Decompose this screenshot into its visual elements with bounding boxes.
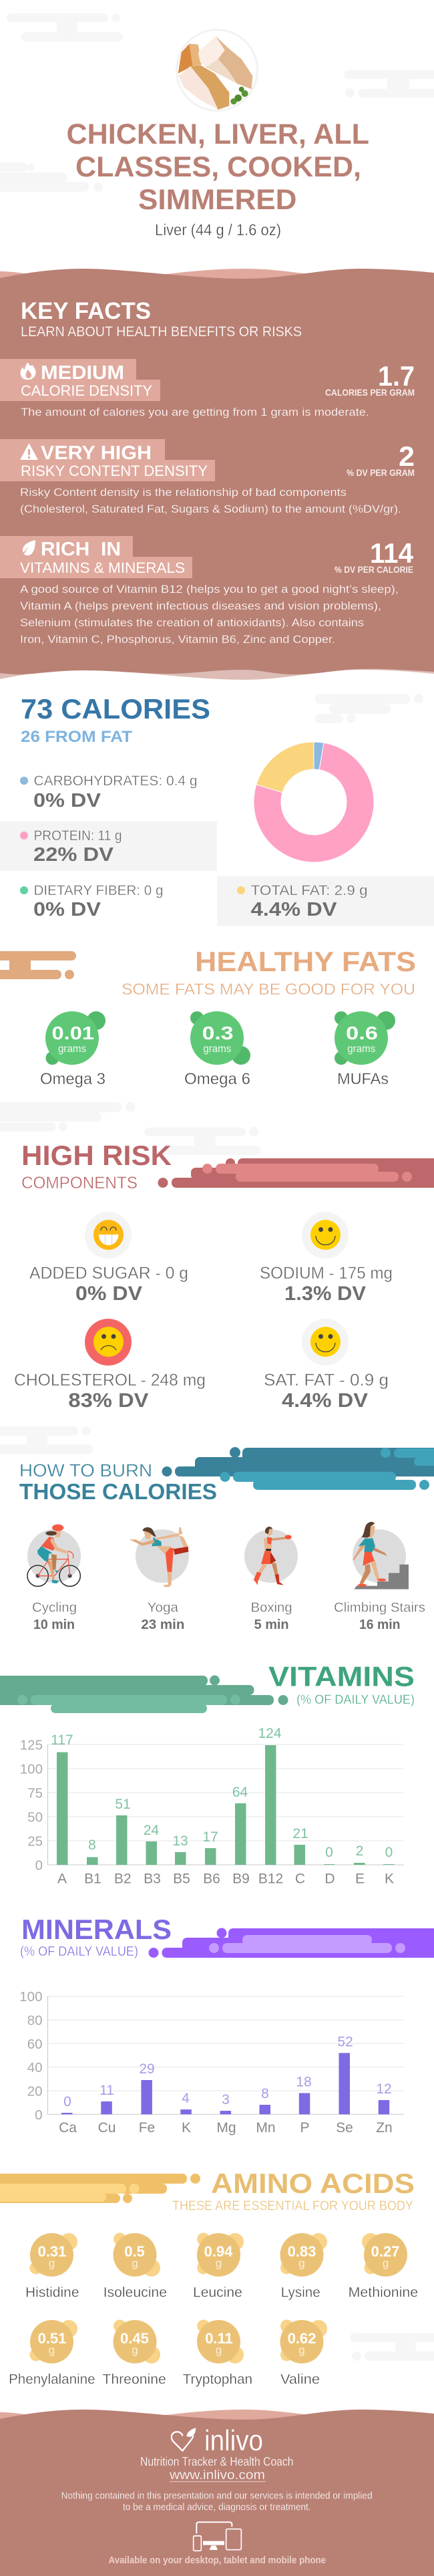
icon: yoga pose bbox=[129, 1527, 189, 1587]
bar chart: minerals: 40 bbox=[27, 2060, 43, 2075]
bar chart: vitamins: 75 bbox=[27, 1786, 43, 1801]
bar chart: minerals: 80 bbox=[27, 2013, 43, 2028]
icon: boxer bbox=[244, 1527, 298, 1585]
value: 2: 2 bbox=[399, 440, 415, 472]
bar chart: vitamins: B2 bbox=[114, 1872, 132, 1886]
heading: minerals: MINERALS bbox=[21, 1914, 172, 1945]
label: vitamins and minerals: VITAMINS & MINERALS bbox=[20, 559, 185, 576]
bar chart: vitamins bbox=[20, 1726, 404, 1886]
heading: how to burn: HOW TO BURN bbox=[19, 1460, 152, 1480]
bar chart: vitamins: B5 bbox=[173, 1872, 190, 1886]
amino: isoleucine: 0.5 bbox=[124, 2243, 145, 2260]
subheading: percent of daily value: (% OF DAILY VALUE) bbox=[296, 1693, 415, 1707]
bar chart: vitamins: A bbox=[57, 1872, 67, 1886]
badge: mufas: grams bbox=[347, 1043, 375, 1055]
bar chart: minerals bbox=[19, 1989, 404, 2136]
component: sodium: SODIUM - 175 mg bbox=[260, 1264, 393, 1283]
exercise: boxing: 5 min bbox=[254, 1618, 289, 1632]
exercise: yoga: 23 min bbox=[141, 1618, 184, 1632]
bar chart: minerals: K bbox=[182, 2120, 191, 2136]
amino: isoleucine bbox=[103, 2232, 167, 2300]
bar chart: minerals: 52 bbox=[337, 2035, 353, 2049]
amino: histidine bbox=[25, 2233, 79, 2300]
amino: histidine: g bbox=[49, 2257, 55, 2270]
banner: orange stripes bbox=[0, 951, 76, 979]
amino: lysine: g bbox=[298, 2257, 305, 2270]
label: calorie density: CALORIE DENSITY bbox=[21, 382, 152, 399]
amino: valine: Valine bbox=[280, 2371, 320, 2387]
amino: histidine: 0.31 bbox=[38, 2243, 66, 2260]
component: added sugar: ADDED SUGAR - 0 g bbox=[29, 1264, 188, 1283]
badge: omega 6: 0.3 bbox=[202, 1023, 234, 1043]
bar chart: vitamins: 100 bbox=[20, 1762, 43, 1777]
amino: valine: 0.62 bbox=[288, 2330, 316, 2347]
macro: total fat bbox=[237, 883, 368, 920]
exercise: boxing bbox=[244, 1527, 298, 1632]
heading: amino acids: AMINO ACIDS bbox=[211, 2168, 415, 2199]
amino: methionine: Methionine bbox=[349, 2285, 418, 2300]
bar chart: vitamins: 13 bbox=[172, 1833, 188, 1849]
panel: minerals bbox=[19, 1914, 434, 2136]
footer bbox=[0, 2410, 434, 2576]
macro: carbohydrates: 0% DV bbox=[33, 790, 101, 811]
banner: yellow stripes bbox=[0, 2174, 200, 2203]
exercise: cycling: Cycling bbox=[32, 1600, 77, 1615]
amino: threonine: Threonine bbox=[102, 2371, 166, 2387]
description: risky content: (Cholesterol, Saturated Fat, Sugars & Sodium) to the amount (%DV/gr). bbox=[20, 503, 401, 515]
icon: leaf bbox=[23, 540, 35, 555]
bar chart: vitamins: 51 bbox=[115, 1797, 131, 1812]
bar chart: minerals: 60 bbox=[27, 2037, 43, 2052]
title: CLASSES, COOKED, bbox=[75, 151, 361, 183]
bar chart: vitamins: 0 bbox=[35, 1858, 43, 1873]
bar chart: vitamins: B12 bbox=[258, 1872, 283, 1886]
bar chart: vitamins: E bbox=[355, 1872, 365, 1886]
badge: omega 6: Omega 6 bbox=[184, 1070, 250, 1088]
amino: tryptophan: Tryptophan bbox=[183, 2371, 252, 2387]
subheading: healthy fats: SOME FATS MAY BE GOOD FOR YOU bbox=[122, 981, 415, 999]
subheading: key facts: LEARN ABOUT HEALTH BENEFITS OR RISKS bbox=[21, 324, 302, 340]
component: added sugar bbox=[29, 1212, 188, 1305]
heading: healthy fats: HEALTHY FATS bbox=[195, 946, 416, 977]
exercise: cycling: 10 min bbox=[33, 1618, 75, 1632]
description: vitamins and minerals: Selenium (stimulates the creation of antioxidants). Also contains bbox=[20, 616, 364, 629]
panel: calories bbox=[0, 693, 434, 926]
exercise: yoga: Yoga bbox=[148, 1600, 179, 1615]
component: cholesterol bbox=[14, 1319, 206, 1412]
food photo bbox=[176, 29, 258, 111]
disclaimer: Nothing contained in this presentation and our services is intended or implied bbox=[61, 2490, 373, 2502]
icon: grinning face bbox=[93, 1220, 124, 1250]
banner: teal stripes bbox=[162, 1447, 434, 1490]
amino: lysine bbox=[280, 2233, 327, 2300]
bar chart: vitamins: B3 bbox=[144, 1872, 161, 1886]
unit: calories per gram: CALORIES PER GRAM bbox=[325, 388, 415, 398]
description: calorie density: The amount of calories you are getting from 1 gram is moderate. bbox=[21, 406, 369, 418]
serving size: Liver (44 g / 1.6 oz) bbox=[155, 221, 281, 239]
icon: smiling face bbox=[310, 1327, 341, 1357]
amino: tryptophan: g bbox=[216, 2344, 222, 2357]
amino: lysine: Lysine bbox=[281, 2285, 320, 2300]
component: cholesterol: 83% DV bbox=[68, 1390, 148, 1412]
icon: flame bbox=[21, 362, 36, 380]
amino: histidine: Histidine bbox=[25, 2285, 79, 2300]
subheading: percent of daily value: (% OF DAILY VALUE) bbox=[20, 1944, 138, 1959]
value: 114: 114 bbox=[370, 537, 414, 569]
icon: cyclist bbox=[27, 1525, 81, 1586]
bar chart: minerals: 4 bbox=[182, 2091, 190, 2106]
bar chart: vitamins: C bbox=[295, 1872, 305, 1886]
amino: methionine: g bbox=[383, 2257, 389, 2270]
icon: sad face bbox=[93, 1327, 124, 1357]
amino: phenylalanine: 0.51 bbox=[38, 2330, 66, 2347]
amino: isoleucine: g bbox=[132, 2257, 138, 2270]
badge: mufas bbox=[335, 1011, 395, 1088]
bar chart: vitamins: 64 bbox=[232, 1785, 248, 1800]
value: 1.7: 1.7 bbox=[378, 360, 415, 392]
description: vitamins and minerals bbox=[20, 583, 399, 646]
bar chart: vitamins: 8 bbox=[88, 1837, 96, 1853]
macro: carbohydrates: CARBOHYDRATES: 0.4 g bbox=[33, 773, 198, 789]
donut chart bbox=[254, 742, 374, 862]
description: risky content bbox=[20, 486, 401, 515]
bar chart: vitamins: B9 bbox=[232, 1872, 250, 1886]
bar chart: minerals: Fe bbox=[139, 2120, 155, 2136]
bar chart: vitamins: 125 bbox=[20, 1738, 43, 1753]
bar chart: minerals: Se bbox=[336, 2120, 353, 2136]
bar chart: vitamins: 17 bbox=[202, 1829, 218, 1845]
bar chart: minerals: Mg bbox=[216, 2120, 236, 2136]
macro: protein: PROTEIN: 11 g bbox=[33, 828, 122, 844]
bar chart: minerals: Zn bbox=[376, 2120, 393, 2136]
macro: dietary fiber: DIETARY FIBER: 0 g bbox=[33, 883, 163, 898]
bar chart: minerals: 0 bbox=[63, 2094, 71, 2109]
exercise: yoga bbox=[129, 1527, 189, 1632]
amino: leucine: Leucine bbox=[193, 2285, 242, 2300]
bar chart: vitamins: 50 bbox=[27, 1810, 43, 1825]
badge: omega 3: 0.01 bbox=[52, 1023, 94, 1043]
icon: stair climber bbox=[353, 1522, 409, 1589]
amino: phenylalanine bbox=[9, 2320, 95, 2387]
amino: leucine: g bbox=[216, 2257, 222, 2270]
heading: key facts: KEY FACTS bbox=[21, 298, 151, 324]
panel: amino acids bbox=[0, 2168, 418, 2387]
bar chart: minerals: 100 bbox=[19, 1989, 43, 2005]
bar chart: minerals: 11 bbox=[99, 2083, 114, 2098]
subheading: amino acids: THESE ARE ESSENTIAL FOR YOUR BODY bbox=[172, 2199, 413, 2214]
description: risky content: Risky Content density is the relationship of bad components bbox=[20, 486, 347, 499]
bar chart: minerals: 8 bbox=[261, 2086, 269, 2101]
bar chart: vitamins: B6 bbox=[203, 1872, 220, 1886]
heading: vitamins: VITAMINS bbox=[268, 1660, 415, 1692]
bar chart: vitamins: 117 bbox=[51, 1732, 73, 1748]
amino: lysine: 0.83 bbox=[288, 2243, 316, 2260]
macro: dietary fiber: 0% DV bbox=[33, 899, 101, 920]
macro: total fat: TOTAL FAT: 2.9 g bbox=[251, 883, 368, 898]
amino: tryptophan bbox=[183, 2319, 252, 2387]
bar chart: minerals: Mn bbox=[256, 2120, 276, 2136]
website link: www.inlivo.com bbox=[169, 2468, 265, 2482]
component: saturated fat bbox=[264, 1319, 389, 1412]
fact: risky content density bbox=[0, 439, 415, 515]
description: vitamins and minerals: A good source of Vitamin B12 (helps you to get a good night’s sleep), bbox=[20, 583, 399, 596]
banner: green stripes bbox=[0, 1675, 288, 1713]
badge: mufas: MUFAs bbox=[337, 1070, 389, 1088]
logo: inlivo bbox=[172, 2424, 263, 2457]
label: risky content density: RISKY CONTENT DENSITY bbox=[21, 463, 208, 479]
badge: omega 6: grams bbox=[203, 1043, 231, 1055]
panel: vitamins bbox=[0, 1660, 415, 1886]
bar chart: minerals: Ca bbox=[59, 2120, 77, 2136]
macro: total fat: 4.4% DV bbox=[251, 899, 337, 920]
subheading: components: COMPONENTS bbox=[21, 1174, 138, 1192]
badge: mufas: 0.6 bbox=[346, 1023, 378, 1043]
exercise: cycling bbox=[27, 1525, 81, 1632]
bar chart: minerals: 12 bbox=[376, 2081, 392, 2097]
bar chart: vitamins: 0 bbox=[325, 1845, 333, 1860]
badge: omega 3: grams bbox=[58, 1043, 86, 1055]
amino: valine bbox=[280, 2319, 327, 2387]
subheading: 26 from fat: 26 FROM FAT bbox=[21, 728, 132, 746]
unit: dv per gram: % DV PER GRAM bbox=[347, 468, 415, 478]
amino: threonine: 0.45 bbox=[120, 2330, 149, 2347]
component: added sugar: 0% DV bbox=[75, 1283, 142, 1305]
title bbox=[67, 118, 369, 216]
bar chart: minerals: 20 bbox=[27, 2084, 43, 2099]
icon: warning triangle bbox=[20, 443, 38, 460]
title: CHICKEN, LIVER, ALL bbox=[67, 118, 369, 150]
bar chart: minerals: 0 bbox=[35, 2107, 43, 2123]
bar chart: vitamins: D bbox=[324, 1872, 335, 1886]
logo: inlivo: inlivo bbox=[204, 2424, 263, 2457]
bar chart: minerals: 18 bbox=[296, 2075, 312, 2089]
exercise: climbing stairs: 16 min bbox=[359, 1618, 401, 1632]
panel: how to burn calories bbox=[19, 1447, 434, 1632]
label: medium: MEDIUM bbox=[41, 362, 124, 384]
amino: phenylalanine: g bbox=[49, 2344, 55, 2357]
bar chart: minerals: Cu bbox=[98, 2120, 116, 2136]
amino: threonine bbox=[102, 2319, 166, 2387]
component: saturated fat: 4.4% DV bbox=[282, 1390, 368, 1412]
label: rich in: RICH IN bbox=[41, 539, 121, 560]
bar chart: vitamins: 21 bbox=[292, 1826, 308, 1841]
heading: those calories: THOSE CALORIES bbox=[19, 1479, 217, 1504]
disclaimer: to be a medical advice, diagnosis or treatment. bbox=[123, 2501, 311, 2513]
macro: carbohydrates bbox=[20, 773, 198, 811]
fact: rich in vitamins and minerals bbox=[0, 536, 414, 646]
macro: dietary fiber bbox=[20, 883, 163, 920]
banner: purple stripes bbox=[148, 1928, 434, 1958]
tagline: Nutrition Tracker & Health Coach bbox=[140, 2455, 294, 2468]
badge: omega 3 bbox=[40, 1011, 105, 1088]
description: vitamins and minerals: Iron, Vitamin C, Phosphorus, Vitamin B6, Zinc and Copper. bbox=[20, 633, 335, 646]
badge: omega 6 bbox=[184, 1011, 250, 1088]
bar chart: vitamins: 2 bbox=[356, 1843, 363, 1859]
macro: protein: 22% DV bbox=[33, 844, 114, 866]
amino: tryptophan: 0.11 bbox=[205, 2330, 233, 2347]
exercise: climbing stairs bbox=[334, 1522, 425, 1632]
amino: isoleucine: Isoleucine bbox=[103, 2285, 167, 2300]
exercise: climbing stairs: Climbing Stairs bbox=[334, 1600, 425, 1615]
amino: methionine: 0.27 bbox=[371, 2243, 399, 2260]
bar chart: vitamins: K bbox=[385, 1872, 394, 1886]
icon: devices bbox=[194, 2522, 241, 2551]
panel: high risk components bbox=[14, 1140, 434, 1412]
panel: key facts bbox=[0, 269, 434, 680]
amino: methionine bbox=[349, 2233, 418, 2300]
component: sodium bbox=[260, 1212, 393, 1305]
unit: dv per calorie: % DV PER CALORIE bbox=[335, 565, 413, 575]
exercise: boxing: Boxing bbox=[251, 1600, 292, 1615]
amino: phenylalanine: Phenylalanine bbox=[9, 2371, 95, 2387]
bar chart: minerals: 3 bbox=[222, 2092, 230, 2107]
title: SIMMERED bbox=[138, 184, 296, 216]
fact: calorie density bbox=[0, 359, 415, 418]
badge: omega 3: Omega 3 bbox=[40, 1070, 105, 1088]
bar chart: vitamins: 25 bbox=[27, 1834, 43, 1849]
amino: threonine: g bbox=[132, 2344, 138, 2357]
disclaimer bbox=[61, 2490, 373, 2513]
heading: 73 calories: 73 CALORIES bbox=[21, 693, 210, 725]
bar chart: vitamins: 124 bbox=[258, 1726, 282, 1741]
banner: red stripes bbox=[158, 1158, 434, 1188]
bar chart: vitamins: 0 bbox=[385, 1845, 393, 1860]
component: sodium: 1.3% DV bbox=[284, 1283, 366, 1305]
bar chart: vitamins: 24 bbox=[144, 1823, 159, 1838]
bar chart: vitamins: B1 bbox=[84, 1872, 101, 1886]
bar chart: minerals: P bbox=[300, 2120, 310, 2136]
label: very high: VERY HIGH bbox=[41, 442, 152, 464]
heading: high risk: HIGH RISK bbox=[21, 1140, 172, 1171]
macro: protein bbox=[20, 828, 122, 866]
panel: healthy fats bbox=[0, 946, 416, 1088]
icon: smiling face bbox=[310, 1220, 341, 1250]
description: vitamins and minerals: Vitamin A (helps prevent infectious diseases and vision problems), bbox=[20, 600, 381, 612]
component: saturated fat: SAT. FAT - 0.9 g bbox=[264, 1371, 389, 1390]
amino: leucine: 0.94 bbox=[204, 2243, 233, 2260]
component: cholesterol: CHOLESTEROL - 248 mg bbox=[14, 1371, 206, 1390]
availability note: Available on your desktop, tablet and mobile phone bbox=[108, 2555, 326, 2566]
amino: leucine bbox=[193, 2232, 244, 2300]
bar chart: minerals: 29 bbox=[139, 2061, 155, 2077]
amino: valine: g bbox=[298, 2344, 305, 2357]
